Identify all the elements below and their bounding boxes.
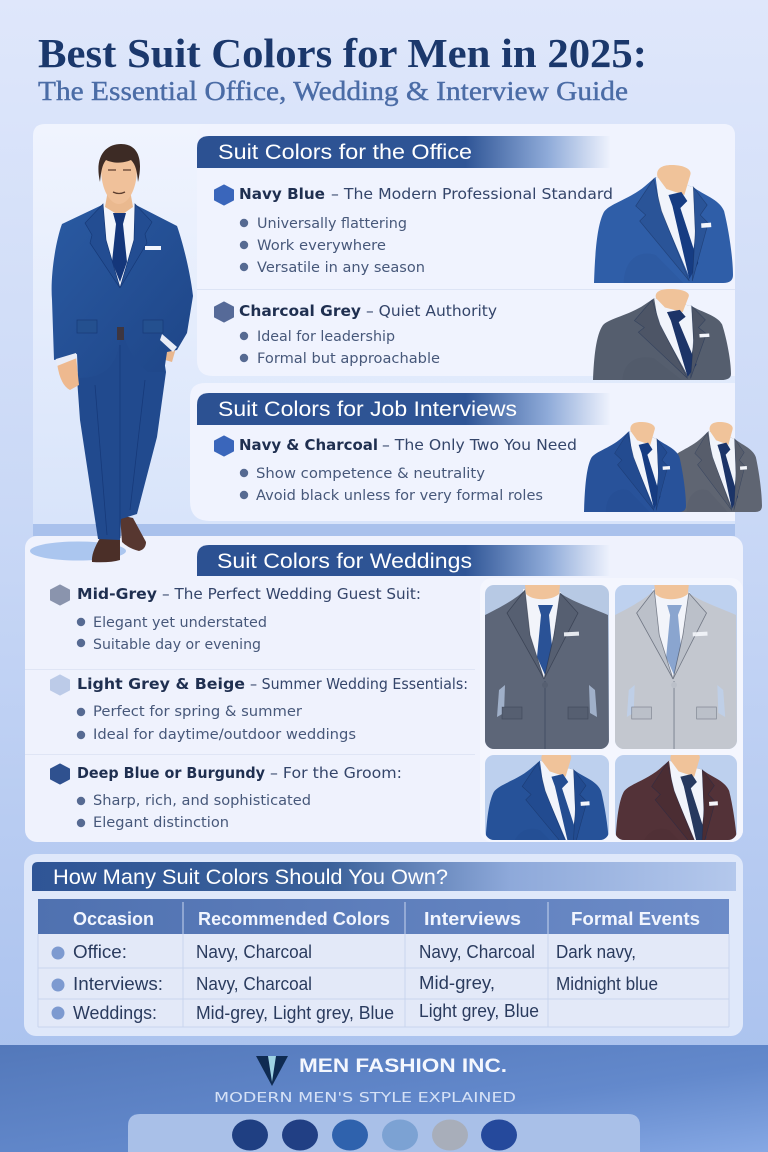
deep blue or burgundy entry — [50, 764, 402, 831]
trouser crease — [95, 345, 145, 538]
navy blue entry: Navy Blue — [239, 185, 325, 203]
dividers — [25, 669, 475, 755]
panel: main upper background — [33, 124, 735, 524]
belt — [117, 327, 124, 340]
lapels — [85, 204, 152, 288]
row: weddings: Light grey, Blue — [419, 1001, 539, 1021]
wedding heading: Suit Colors for Weddings — [217, 550, 472, 573]
right shoe — [120, 515, 146, 551]
interview heading — [197, 393, 610, 425]
row: office: Dark navy, — [556, 942, 636, 962]
icon: navy jacket bust — [594, 165, 733, 283]
header labels: Formal Events — [571, 909, 700, 929]
row: interviews: Navy, Charcoal — [196, 974, 312, 994]
navy blue entry: Universally flattering — [257, 216, 407, 232]
table — [38, 899, 729, 1027]
navy and charcoal entry: – The Only Two You Need — [382, 436, 577, 454]
left cuff and hand — [57, 357, 79, 390]
header labels: Recommended Colors — [198, 909, 390, 929]
navy and charcoal entry: Show competence & neutrality — [256, 466, 485, 482]
navy and charcoal entry: Navy & Charcoal — [239, 436, 378, 454]
icon: logo lapel — [256, 1056, 288, 1086]
row: interviews — [52, 973, 658, 994]
pocket square — [145, 246, 161, 250]
swatch tray — [128, 1114, 640, 1152]
photo: burgundy suit — [615, 755, 737, 840]
row: office: Navy, Charcoal — [196, 942, 312, 962]
deep blue or burgundy entry: Sharp, rich, and sophisticated — [93, 793, 311, 809]
mid-grey entry: – The Perfect Wedding Guest Suit: — [162, 585, 421, 603]
row: office: Office: — [73, 942, 127, 962]
mid-grey entry: Mid-Grey — [77, 585, 157, 603]
navy blue entry — [214, 185, 613, 276]
pockets — [77, 320, 163, 333]
charcoal grey entry: Formal but approachable — [257, 351, 440, 367]
office heading: Suit Colors for the Office — [218, 141, 472, 164]
office card — [197, 124, 735, 376]
left shoe — [92, 536, 120, 562]
navy blue entry: Versatile in any season — [257, 260, 425, 276]
office heading — [197, 136, 610, 168]
deep blue or burgundy entry: Elegant distinction — [93, 815, 229, 831]
light grey and beige entry: Perfect for spring & summer — [93, 704, 302, 720]
icon: navy interview jacket — [584, 422, 686, 512]
panel: suit colors for job interviews — [190, 383, 762, 521]
mid-grey entry: Suitable day or evening — [93, 637, 261, 653]
footer band — [0, 1045, 768, 1152]
row: weddings — [52, 1001, 539, 1023]
interview heading: Suit Colors for Job Interviews — [218, 398, 517, 421]
face details — [108, 170, 131, 194]
charcoal grey entry: – Quiet Authority — [366, 302, 497, 320]
row: office — [52, 942, 636, 962]
row: interviews: Midnight blue — [556, 974, 658, 994]
header labels: Interviews — [424, 909, 521, 929]
figure: man in navy suit — [52, 144, 193, 562]
title block — [38, 30, 647, 106]
mid-grey entry: Elegant yet understated — [93, 615, 267, 631]
charcoal grey entry: Charcoal Grey — [239, 302, 361, 320]
deep blue or burgundy entry: Deep Blue or Burgundy — [77, 764, 265, 782]
photo: light grey suit — [613, 583, 741, 753]
icon: charcoal interview jacket — [666, 422, 762, 512]
tagline: MODERN MEN'S STYLE EXPLAINED — [214, 1091, 516, 1106]
row: office: Navy, Charcoal — [419, 942, 535, 962]
header labels: Occasion — [73, 909, 154, 929]
trousers — [77, 335, 166, 540]
photo: mid-grey suit — [483, 583, 613, 753]
panel: how many suit colors — [24, 854, 743, 1036]
divider — [197, 289, 735, 290]
navy and charcoal entry: Avoid black unless for very formal roles — [256, 488, 543, 504]
hand in pocket — [163, 340, 176, 362]
neck and face — [105, 190, 133, 216]
brand name: MEN FASHION INC. — [299, 1056, 507, 1077]
photo: deep blue suit — [485, 755, 609, 840]
icon: charcoal jacket bust — [593, 289, 731, 380]
navy and charcoal entry — [214, 436, 577, 504]
wedding card — [25, 536, 743, 842]
table heading — [32, 862, 736, 891]
jacket — [52, 205, 193, 378]
light grey and beige entry — [50, 675, 468, 743]
photo backing — [480, 578, 743, 842]
footer background — [0, 1045, 768, 1152]
subtitle: The Essential Office, Wedding & Interview Guide — [38, 76, 628, 106]
main title: Best Suit Colors for Men in 2025: — [38, 30, 647, 76]
light grey and beige entry: Ideal for daytime/outdoor weddings — [93, 727, 356, 743]
table grid — [38, 902, 729, 1027]
light grey and beige entry: Light Grey & Beige — [77, 675, 245, 693]
colour swatches — [232, 1120, 517, 1150]
navy blue entry: – The Modern Professional Standard — [331, 185, 613, 203]
deep blue or burgundy entry: – For the Groom: — [270, 764, 402, 782]
row: weddings: Mid-grey, Light grey, Blue — [196, 1003, 394, 1023]
mid-grey entry — [50, 585, 421, 653]
table heading: How Many Suit Colors Should You Own? — [53, 866, 448, 889]
light grey and beige entry: – Summer Wedding Essentials: — [250, 675, 468, 693]
charcoal grey entry: Ideal for leadership — [257, 329, 395, 345]
row: interviews: Interviews: — [73, 974, 163, 994]
hair — [98, 144, 140, 182]
wedding heading — [197, 545, 610, 576]
panel: suit colors for weddings — [25, 536, 743, 855]
tie — [112, 213, 127, 282]
panel: suit colors for the office — [197, 124, 735, 380]
floor shadow — [30, 542, 126, 560]
table body — [38, 934, 729, 1027]
navy blue entry: Work everywhere — [257, 238, 386, 254]
shirt — [103, 205, 136, 287]
table header row — [38, 899, 729, 934]
charcoal grey entry — [214, 302, 497, 367]
row: weddings: Weddings: — [73, 1003, 157, 1023]
right cuff — [160, 334, 177, 352]
table card — [24, 854, 743, 1036]
band between upper panel and weddings — [33, 524, 735, 536]
interview card — [190, 383, 735, 521]
header labels — [73, 909, 700, 929]
row: interviews: Mid-grey, — [419, 973, 495, 993]
